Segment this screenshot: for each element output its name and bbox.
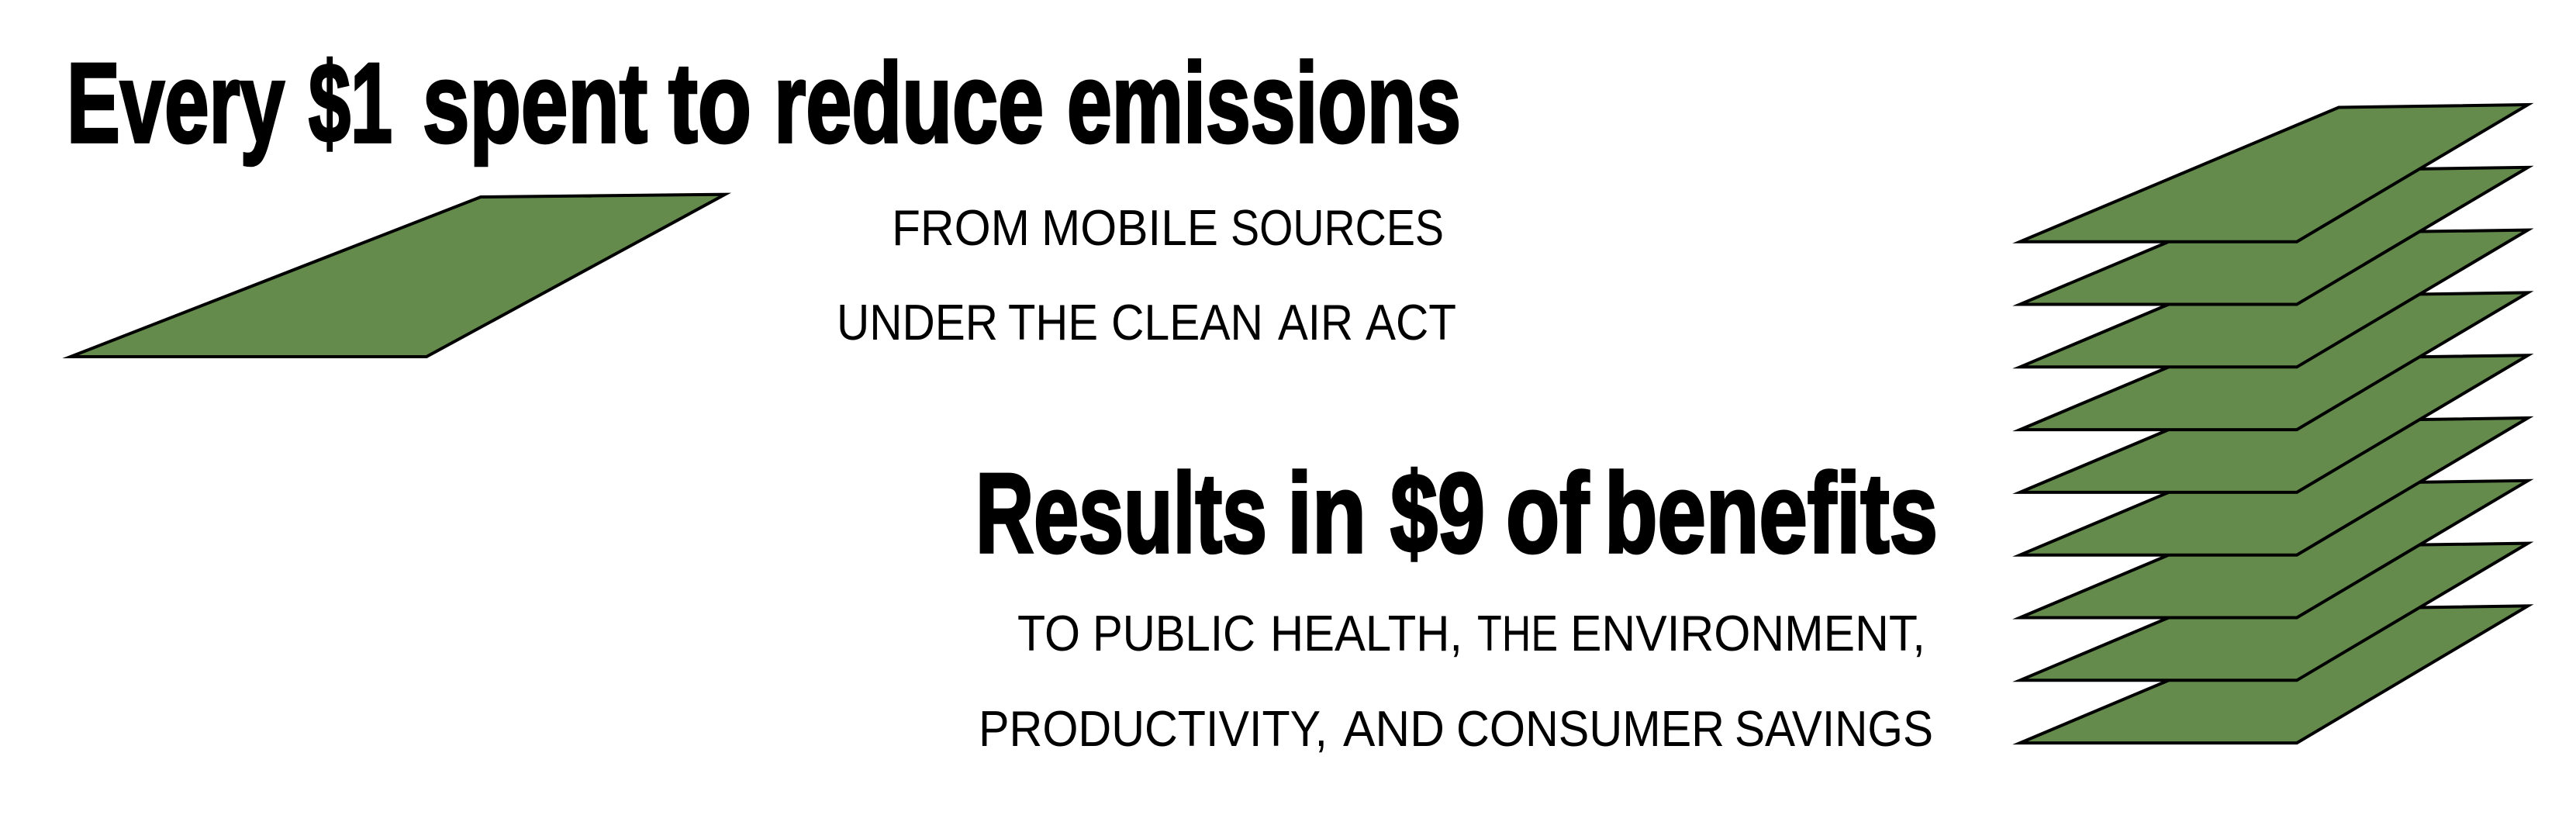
subtext: to public health, the environment, productivity, and consumer savings: CONSUMER: [1456, 700, 1725, 757]
heading: results in $9 of benefits: in: [1287, 450, 1366, 576]
subtext: to public health, the environment, productivity, and consumer savings: PRODUCTIVITY,: [979, 700, 1328, 757]
subtext: to public health, the environment, productivity, and consumer savings: THE: [1477, 605, 1558, 661]
subtext: from mobile sources under the clean air act: THE: [1008, 294, 1098, 351]
subtext: to public health, the environment, productivity, and consumer savings: AND: [1343, 700, 1445, 757]
heading: every $1 spent: to: [668, 40, 751, 166]
heading: every $1 spent: [67, 40, 1461, 166]
subtext: to public health, the environment, productivity, and consumer savings: SAVINGS: [1735, 700, 1933, 757]
heading: results in $9 of benefits: of: [1506, 450, 1589, 576]
subtext: from mobile sources under the clean air act: CLEAN: [1111, 294, 1263, 351]
subtext: from mobile sources under the clean air act: UNDER: [837, 294, 998, 351]
heading: results in $9 of benefits: [975, 450, 1938, 576]
subtext: to public health, the environment, productivity, and consumer savings: TO: [1017, 605, 1080, 661]
icon: stack of nine dollar bill sheets: [2020, 105, 2528, 743]
subtext: to public health, the environment, productivity, and consumer savings: HEALTH,: [1270, 605, 1462, 661]
subtext: from mobile sources under the clean air act: AIR: [1278, 294, 1353, 351]
subtext: from mobile sources under the clean air act: [837, 199, 1456, 351]
heading: results in $9 of benefits: benefits: [1604, 450, 1938, 576]
icon: single dollar bill sheet: [71, 195, 725, 357]
subtext: from mobile sources under the clean air act: SOURCES: [1231, 199, 1444, 256]
subtext: to public health, the environment, productivity, and consumer savings: PUBLIC: [1093, 605, 1255, 661]
heading: results in $9 of benefits: $9: [1390, 450, 1485, 576]
heading: results in $9 of benefits: Results: [975, 450, 1267, 576]
subtext: from mobile sources under the clean air act: MOBILE: [1041, 199, 1218, 256]
subtext: to public health, the environment, productivity, and consumer savings: [979, 605, 1933, 757]
subtext: from mobile sources under the clean air act: FROM: [892, 199, 1030, 256]
heading: every $1 spent: spent: [423, 40, 647, 166]
heading: every $1 spent: $1: [309, 40, 392, 166]
heading: every $1 spent: emissions: [1067, 40, 1461, 166]
heading: every $1 spent: reduce: [774, 40, 1044, 166]
heading: every $1 spent: Every: [67, 40, 285, 166]
subtext: from mobile sources under the clean air act: ACT: [1366, 294, 1456, 351]
subtext: to public health, the environment, productivity, and consumer savings: ENVIRONMENT,: [1570, 605, 1925, 661]
